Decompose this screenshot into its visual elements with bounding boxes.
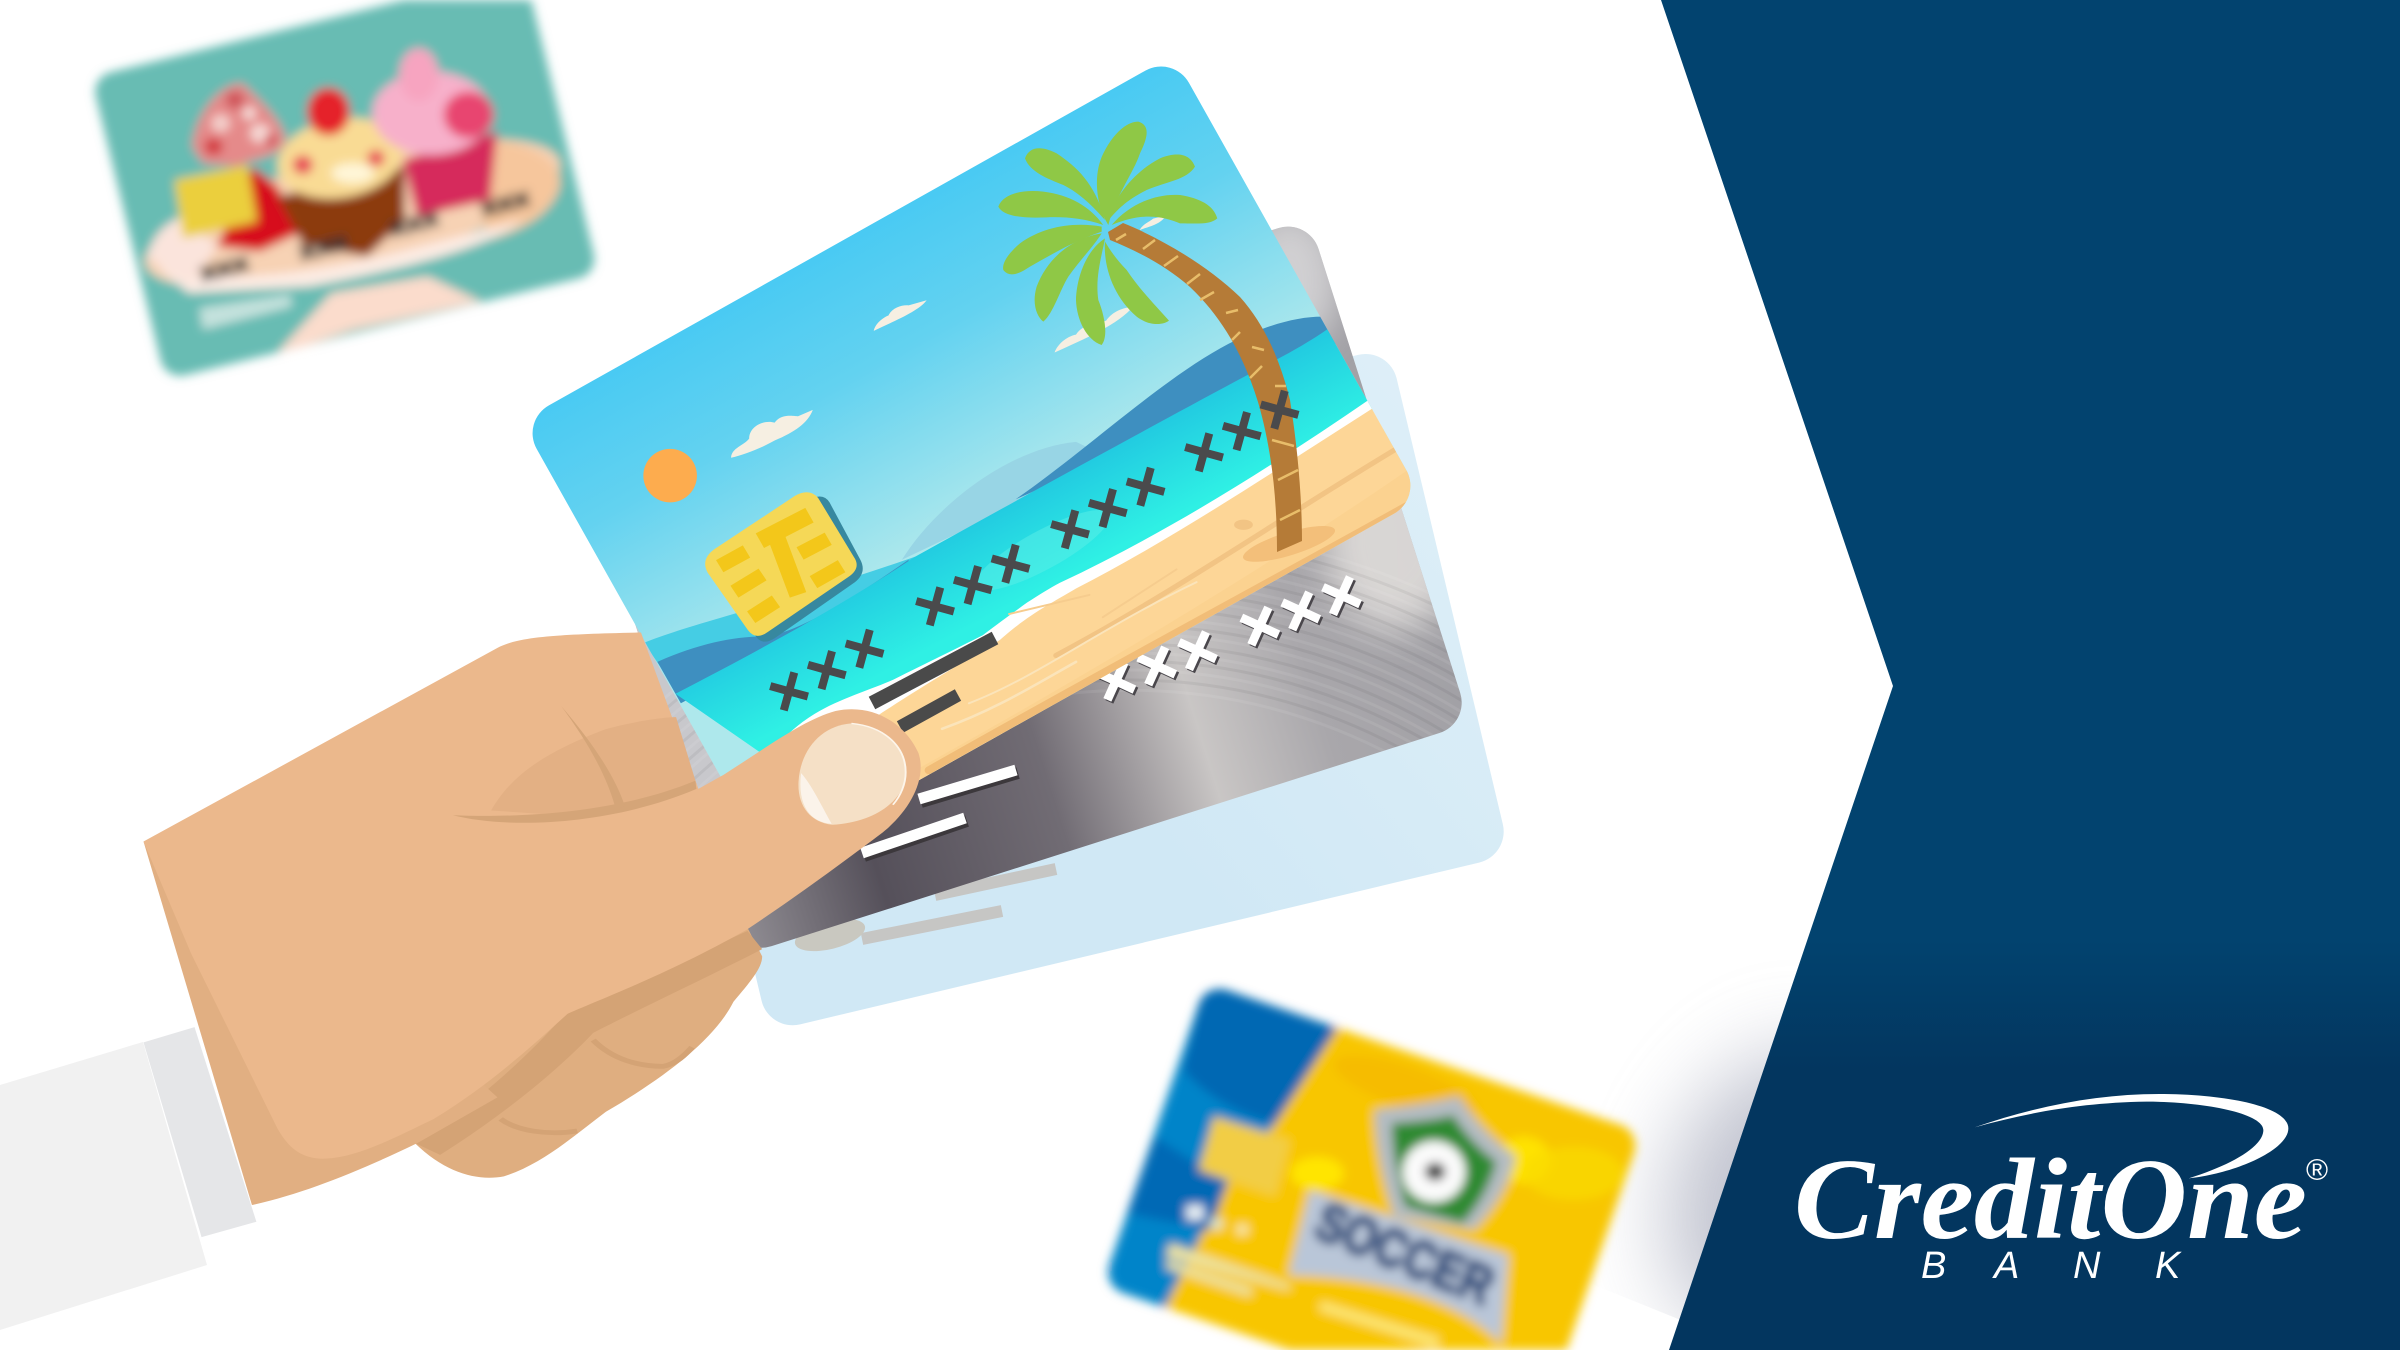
shirt sleeve xyxy=(0,1042,207,1330)
thumbnail xyxy=(798,723,906,825)
main beach card xyxy=(532,66,1410,780)
fingers xyxy=(415,925,762,1178)
card number placeholder: ××× xyxy=(295,226,352,270)
blurred card: soccer xyxy=(1100,980,1644,1350)
navy chevron panel xyxy=(1661,0,2400,1350)
crease lines xyxy=(453,781,696,823)
icon: chip xyxy=(705,492,863,642)
blurred card: cupcakes xyxy=(88,0,602,383)
palm and thumb xyxy=(144,633,921,1159)
beach card number: ××× xyxy=(1170,366,1318,492)
beach card number: ××× xyxy=(1036,443,1184,569)
metal card number xyxy=(1085,552,1379,724)
signature marks xyxy=(792,869,1056,957)
metal card number: ××× xyxy=(1229,552,1377,667)
sky xyxy=(532,66,1406,780)
metal card number: ××× xyxy=(1085,607,1233,722)
card number placeholder xyxy=(196,182,534,291)
shirt cuff xyxy=(144,1027,256,1237)
card number placeholder: ××× xyxy=(386,202,443,246)
brushed metal card xyxy=(635,226,1462,948)
palm shadow side xyxy=(144,842,497,1205)
metal card name bars xyxy=(862,770,1018,856)
pale blue card xyxy=(648,347,1510,1032)
icon: palm tree xyxy=(998,122,1302,552)
soccer banner word: SOCCER xyxy=(1307,1191,1502,1317)
icon: clouds xyxy=(731,215,1166,458)
beach card name bars xyxy=(872,638,995,727)
card number placeholder: ××× xyxy=(196,247,253,291)
logo wordmark: CreditOne xyxy=(1794,1136,2307,1264)
metal card number: ××× xyxy=(1087,609,1235,724)
shadow beside navy panel xyxy=(1623,1015,1947,1350)
card number placeholder: ××× xyxy=(477,182,534,226)
beach card number: ××× xyxy=(755,605,903,731)
metal card number: ××× xyxy=(1231,554,1379,669)
beach scene xyxy=(643,215,1438,818)
logo subline: BANK xyxy=(1921,1245,2182,1287)
beach card number xyxy=(755,366,1318,731)
logo: Credit One Bank xyxy=(1794,1094,2328,1287)
beach card number: ××× xyxy=(901,520,1049,646)
palm fold xyxy=(491,717,696,815)
logo swoosh xyxy=(1975,1094,2288,1178)
registered mark: ® xyxy=(2306,1154,2328,1187)
icon: sun xyxy=(643,449,697,502)
hand holding cards xyxy=(144,633,921,1205)
